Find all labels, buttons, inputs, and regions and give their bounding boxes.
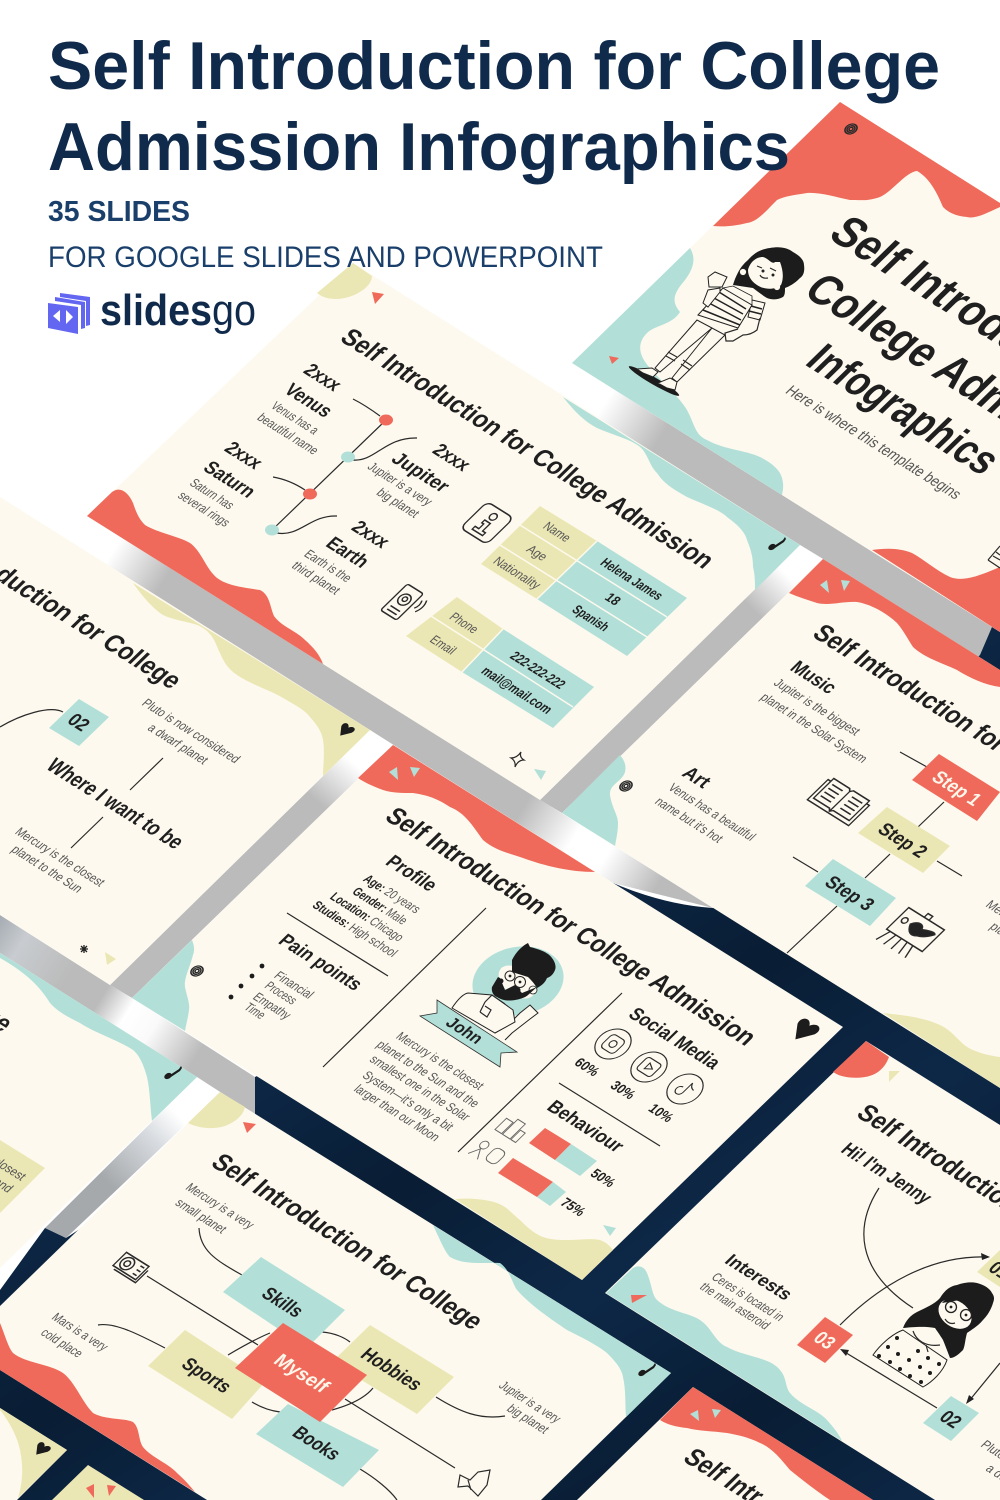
text: Pluto note: a dwarf planet xyxy=(144,721,212,767)
text: art: Venus has a beautiful xyxy=(665,781,759,843)
box: 02 xyxy=(49,699,109,746)
icon: coral triangle xyxy=(243,1122,256,1133)
timeline chart: beautiful name xyxy=(254,411,322,457)
text: pain points: Process xyxy=(261,979,301,1007)
text: Mercury note: Mercury is the closest xyxy=(12,825,109,889)
box: hobbies xyxy=(332,1325,454,1414)
title xyxy=(48,28,940,185)
icon: heart xyxy=(786,1017,822,1045)
box: 03: 03 xyxy=(809,1327,841,1353)
illustration: Jenny portrait xyxy=(873,1282,994,1387)
table: contact details: 222-222-222 xyxy=(507,648,569,692)
box: note xyxy=(0,1140,45,1213)
text: profile: Studies: High school xyxy=(309,898,401,960)
icon: spiral xyxy=(617,779,635,793)
text: pain points: Time xyxy=(241,1000,269,1022)
icon: open book xyxy=(807,777,872,826)
behaviour section: 50% xyxy=(587,1166,619,1190)
icon: teal triangles xyxy=(820,580,850,593)
social media section xyxy=(571,1003,726,1125)
box: 01 xyxy=(977,1250,1000,1287)
panel: steps slide xyxy=(562,559,1000,1088)
social media section: 30% xyxy=(607,1078,639,1102)
text: interests: Ceres is located in xyxy=(708,1270,788,1324)
timeline chart xyxy=(175,359,476,597)
timeline chart: 2xxx xyxy=(428,439,476,475)
banner: John xyxy=(420,1000,517,1067)
box: 02 xyxy=(923,1396,979,1441)
icon: heart xyxy=(335,722,356,739)
heading: where I want to be: Where I want to be xyxy=(41,754,189,854)
timeline chart: Saturn has xyxy=(186,476,238,512)
icon: asterisk xyxy=(80,945,88,953)
connector xyxy=(0,710,63,727)
text: profile: Profile xyxy=(381,851,443,895)
panel: Jenny slide xyxy=(605,1041,1000,1500)
text: music: Music xyxy=(786,656,842,698)
behaviour section xyxy=(468,1096,629,1219)
table: personal details xyxy=(481,506,687,656)
table: personal details: Spanish xyxy=(569,602,613,634)
box: skills xyxy=(223,1257,345,1348)
box: sports xyxy=(148,1330,265,1419)
text: interests: the main asteroid xyxy=(696,1280,774,1332)
box: 03 xyxy=(797,1317,853,1363)
timeline chart: big planet xyxy=(373,486,423,521)
background: slide shadows xyxy=(0,363,1000,1238)
text: art: name but it's hot xyxy=(652,795,727,846)
icon: coral triangle xyxy=(372,292,384,304)
table: personal details: Name xyxy=(540,519,574,545)
step 3 xyxy=(805,859,896,926)
text: Mercury note: planet to the Sun xyxy=(8,843,86,895)
icon: khaki triangle xyxy=(889,1071,900,1082)
table: contact details: mail@mail.com xyxy=(478,663,556,717)
step connectors xyxy=(787,752,962,953)
timeline chart: 2xxx xyxy=(220,437,268,473)
icon: coral triangle xyxy=(609,356,619,364)
icon: spiral xyxy=(842,122,860,136)
text: music: planet in the Solar System xyxy=(757,690,871,766)
text: interests: Interests xyxy=(720,1250,798,1304)
connectors xyxy=(98,1228,505,1500)
text: profile: Gender: Male xyxy=(349,885,411,927)
title: Self Introduction for College Admission xyxy=(334,324,720,574)
connector lines xyxy=(71,758,163,848)
panel: timeline and table slide xyxy=(87,263,800,800)
box: books xyxy=(256,1404,379,1487)
table: personal details: Age xyxy=(523,542,551,564)
icon: money xyxy=(111,1252,151,1283)
text: pain points: Pain points xyxy=(274,930,368,994)
text: bio: smallest one in the Solar xyxy=(366,1052,474,1124)
icon: music note xyxy=(163,1066,182,1080)
panel: left partial slide xyxy=(0,858,197,1268)
text: interests xyxy=(696,1250,798,1332)
panel: profile slide xyxy=(132,745,843,1280)
text: bio xyxy=(351,1029,488,1144)
icon: coral triangles xyxy=(86,1484,116,1498)
icon: music note xyxy=(767,537,786,551)
panel: bottom-right partial slide xyxy=(577,1387,873,1500)
panel: where I want to be slide xyxy=(0,497,370,985)
icon: teal triangle xyxy=(603,1225,616,1236)
text: profile: Location: Chicago xyxy=(327,890,407,944)
timeline chart: third planet xyxy=(288,559,344,597)
box: books: Books xyxy=(288,1422,346,1464)
title: Admission Infographics xyxy=(48,109,790,185)
box: sports: Sports xyxy=(177,1353,237,1397)
timeline chart: Earth is the xyxy=(301,547,355,585)
text: bio: larger than our Moon xyxy=(351,1082,443,1144)
text: Mercury note: Mercury is a very xyxy=(182,1180,258,1232)
timeline chart: several rings xyxy=(175,489,233,529)
step 3: Step 3 xyxy=(820,871,880,915)
behaviour section: 75% xyxy=(557,1195,589,1219)
text: profile xyxy=(309,851,443,960)
text: Pluto note: Pluto is now considered xyxy=(139,696,243,766)
illustration: John portrait xyxy=(452,938,570,1040)
table: contact details: Phone xyxy=(446,610,482,636)
panel: bottom-left partial slide xyxy=(0,1408,67,1500)
social media section: 10% xyxy=(645,1101,677,1125)
arrows xyxy=(840,1188,1000,1408)
text: pain points xyxy=(229,930,368,1022)
box: skills: Skills xyxy=(257,1283,309,1321)
subtitle: cover: Here is where this template begins xyxy=(781,383,965,503)
behaviour section: Behaviour xyxy=(543,1096,629,1156)
text: Mars note: cold place xyxy=(38,1326,87,1360)
table: personal details: 18 xyxy=(602,590,624,608)
panel: bottom partial slide xyxy=(52,1465,144,1500)
background: navy backdrop xyxy=(0,627,1000,1500)
timeline chart: Venus xyxy=(280,379,338,421)
dividers xyxy=(287,908,660,1152)
timeline chart: Earth xyxy=(322,532,374,572)
icon: khaki triangle xyxy=(105,952,116,965)
step 2 xyxy=(858,807,950,873)
text: Mars note: Mars is a very xyxy=(49,1310,112,1354)
icon: globe map xyxy=(458,1470,490,1496)
text: music: Jupiter is the biggest xyxy=(770,676,864,738)
text: art xyxy=(652,762,759,846)
subtitle: platforms: FOR GOOGLE SLIDES AND POWERPOINT xyxy=(48,241,603,274)
table: personal details: Helena James xyxy=(597,555,667,603)
subtitle: slide count: 35 SLIDES xyxy=(48,196,190,228)
icon: heart xyxy=(31,1441,52,1458)
box: myself xyxy=(235,1323,367,1422)
table: personal details: Nationality xyxy=(490,554,545,592)
icon: music note xyxy=(637,1363,656,1377)
title: Self Introduction for College xyxy=(205,1149,489,1335)
timeline chart: Saturn xyxy=(199,457,261,501)
text: bio: planet to the Sun and the xyxy=(373,1038,483,1110)
icon: spiral xyxy=(188,964,206,978)
box: 02: 02 xyxy=(63,709,95,735)
text: pain points: Empathy xyxy=(250,990,295,1022)
icon: coral triangle xyxy=(631,1295,647,1303)
text: Jupiter note: Jupiter is a very xyxy=(496,1379,565,1426)
text: art: Art xyxy=(678,762,716,792)
timeline chart: 2xxx xyxy=(347,516,395,552)
text: bio: Mercury is the closest xyxy=(393,1029,488,1093)
icon: notebook corner xyxy=(988,546,1000,568)
step 2: Step 2 xyxy=(873,818,933,862)
icon: teal triangles xyxy=(690,1409,721,1421)
illustration: waving girl xyxy=(627,247,804,399)
text: bio: System—it's only a bit xyxy=(359,1068,457,1134)
timeline chart: 2xxx xyxy=(299,359,347,395)
icon: info xyxy=(460,502,514,544)
timeline chart: Jupiter is a very xyxy=(364,460,436,509)
timeline chart: Jupiter xyxy=(387,448,455,496)
box: myself: Myself xyxy=(269,1350,336,1397)
text: Mercury note: small planet xyxy=(172,1196,230,1236)
panel: cover slide xyxy=(572,102,1000,632)
box: 02: 02 xyxy=(935,1406,967,1432)
box: hobbies: Hobbies xyxy=(356,1344,428,1394)
text: profile: Age: 20 years xyxy=(360,872,424,916)
icon: teal triangles xyxy=(389,767,420,780)
text: clipped note xyxy=(983,898,1000,947)
text: Jupiter note: big planet xyxy=(504,1402,553,1437)
icon: easel xyxy=(876,904,948,962)
heading: Hi I'm Jenny: Hi! I'm Jenny xyxy=(837,1138,938,1208)
step 1 xyxy=(912,754,1000,821)
banner: John: John xyxy=(441,1014,487,1048)
icon: teal triangle xyxy=(534,769,546,780)
social media section: Social Media xyxy=(624,1003,726,1073)
table: contact details: Email xyxy=(427,633,459,657)
icon: phone xyxy=(381,584,431,625)
logo: slidesgo: slidesgo xyxy=(100,286,256,335)
social media section: 60% xyxy=(571,1055,603,1079)
title: Self Introduction for College xyxy=(48,28,940,104)
title: Self Introduction for College Admission xyxy=(379,803,762,1051)
table: contact details xyxy=(406,597,594,728)
timeline chart: Venus has a xyxy=(268,399,322,437)
step 1: Step 1 xyxy=(927,766,987,810)
icon: star xyxy=(511,752,524,767)
text: music xyxy=(757,656,871,766)
panel: Myself slide xyxy=(0,1092,671,1500)
text: pain points: Financial xyxy=(271,969,317,1001)
